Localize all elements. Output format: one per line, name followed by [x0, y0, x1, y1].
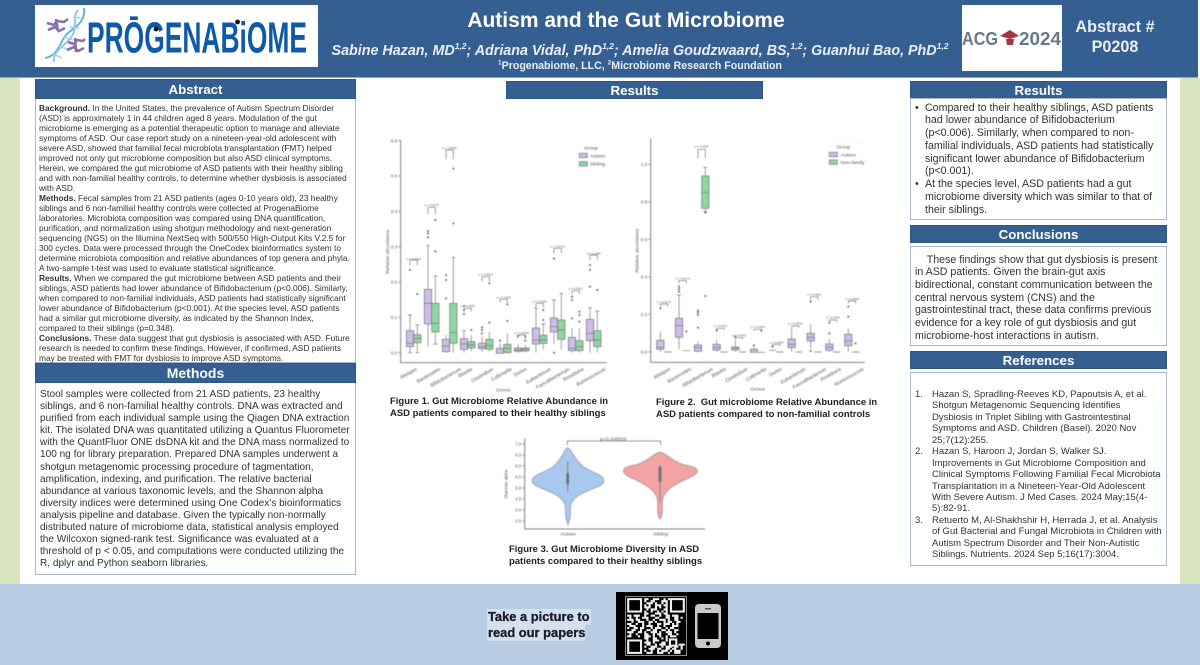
figure 1 legend: Sibling [590, 162, 605, 168]
methods text: distributed nature of microbiome data, statistical analysis employed [40, 522, 339, 533]
abstract text: determine microbiota composition and relative abundances of top genera and phyla. [39, 253, 350, 263]
logo: ACG 2024 [962, 5, 1062, 71]
methods text: siblings, and 6 non-familial healthy controls. DNA was extracted and [40, 401, 343, 412]
chart: figure 2 box plot: 0.2 [641, 312, 648, 317]
Dorea boxes [514, 331, 529, 353]
reference list: 5):82-91. [932, 503, 970, 514]
figure 2 legend: Autism [841, 152, 856, 158]
abstract text: Results. When we compared the gut microbiome between ASD patients and their [39, 273, 341, 283]
Faecalibacterium boxes [550, 244, 565, 353]
panel: conclusions [910, 246, 1167, 346]
results bullets: Compared to their healthy siblings, ASD patients [925, 102, 1153, 114]
logo: ACG 2024: ACG [962, 29, 998, 49]
chart: figure 1 box plot: 0.6 [391, 138, 398, 143]
bullet marks [915, 102, 919, 190]
Faecalibacterium boxes: p = 0.5741 [551, 244, 565, 248]
figure 1 legend: Autism [590, 153, 605, 159]
Collinsella boxes: p = 0.3146 [497, 295, 511, 299]
logo: ACG 2024: 2024 [1019, 29, 1061, 49]
abstract text: when compared to non-familial individuals, ASD patients had statistically significant [39, 293, 346, 303]
Ruminococcus boxes [586, 251, 601, 353]
Blautia boxes: p = 0.6284 [461, 304, 475, 308]
methods text: threshold of p < 0.05, and computations were conducted utilizing the [40, 546, 344, 557]
chart: figure 3 violin plot: 3.5 [515, 519, 522, 524]
chart: figure 2 box plot: Ruminococcus [834, 366, 865, 388]
chart: figure 2 box plot: Bacteroides [667, 366, 693, 385]
figure 1 legend: Group [584, 146, 598, 152]
abstract text: Conclusions. These data suggest that gut dysbiosis is associated with ASD. Future [39, 333, 350, 343]
Bacteroides boxes: p = 0.0275 [425, 203, 439, 207]
reference list: Clinical Symptoms Following Familial Fecal Microbiota [932, 469, 1161, 480]
methods text: kit. The isolated DNA was quantitated utilizing a Quantus Fluorometer [40, 425, 350, 436]
Bacteroides boxes [675, 277, 690, 351]
Roseburia boxes [826, 316, 840, 352]
methods text: Stool samples were collected from 21 ASD patients, 23 healthy [40, 389, 320, 400]
reference list: Dysbiosis in Triplet Sibling with Gastrointestinal [932, 412, 1131, 423]
Dorea boxes: p = 0.0005 [769, 340, 784, 344]
methods text: shotgun metagenomic processing procedure of tagmentation, [40, 462, 314, 473]
reference list: of Gut Bacterial and Fungal Microbiota in Children with [932, 526, 1162, 537]
chart: figure 3 violin plot: 5.5 [515, 475, 522, 480]
Eubacterium boxes [788, 322, 803, 352]
abstract text: (ASD) is approximately 1 in 44 children aged 8 years. Modulation of the gut [39, 113, 317, 123]
Alistipes boxes: p = 0.0028 [407, 257, 421, 261]
results bullets: (p<0.001). [925, 165, 974, 177]
chart: figure 2 box plot: Eubacterium [780, 367, 807, 386]
chart: figure 3 violin plot: 6.5 [515, 453, 522, 458]
caption: figure 1 [390, 396, 608, 419]
QR code and phone panel [616, 592, 728, 660]
chart: figure 1 box plot: Faecalibacterium [535, 367, 571, 391]
Roseburia boxes: p = 0.9421 [569, 287, 583, 291]
abstract text: had a similar gut microbiome diversity, as indicated by the Shannon Index, [39, 313, 313, 323]
Bifidobacterium boxes [694, 144, 709, 352]
chart: figure 1 box plot: 0.1 [391, 315, 398, 320]
chart: figure 3 violin plot: Sibling [653, 531, 668, 537]
chart: figure 3 violin plot: Shannon alpha [504, 469, 509, 499]
conclusions text: gastrointestinal tract, these data confirms previous [915, 304, 1151, 316]
chart: figure 3 violin plot: 4.0 [515, 508, 522, 513]
chart: figure 1 box plot: Clostridium [470, 367, 495, 384]
Ruminococcus boxes [845, 297, 859, 352]
chart: figure 1 box plot: Dorea [513, 366, 528, 379]
Eubacterium boxes [532, 300, 547, 353]
abstract text: Methods. Fecal samples from 21 ASD patients (ages 0-10 years old), 23 healthy [39, 193, 338, 203]
abstract text: severe ASD, showed that familial fecal microbiota transplantation (FMT) helped [39, 143, 332, 153]
abstract text: A two-sample t-test was used to evaluate statistical significance. [39, 263, 276, 273]
Eubacterium boxes: p = 0.0026 [788, 322, 803, 326]
chart: figure 1 box plot: 0.0 [391, 350, 398, 355]
abstract text: siblings and 6 non-familial healthy controls were collected at ProgenaBiome [39, 203, 319, 213]
Roseburia boxes: p = 0.0001 [826, 316, 840, 320]
chart: figure 1 box plot: Genus [496, 387, 511, 393]
chart: figure 1 box plot: Alistipes [399, 366, 419, 381]
conclusions text [915, 254, 1158, 342]
methods text: R, dplyr and Python seaborn libraries. [40, 558, 208, 569]
abstract text: may be treated with FMT for dysbiosis to improve ASD symptoms. [39, 353, 283, 363]
call to action text: read our papers [488, 625, 585, 640]
reference list: Transplantation in a Nineteen-Year-Old Adolescent [932, 480, 1145, 492]
Eubacterium boxes: p = 0.9326 [533, 300, 547, 304]
affiliations: 1Progenabiome, LLC, 2Microbiome Research Foundation [498, 59, 782, 72]
significance bracket [567, 436, 661, 445]
chart: figure 2 box plot: Clostridium [724, 367, 749, 384]
chart: figure 2 box plot: 0.8 [641, 200, 648, 205]
reference list: Retuerto M, Al-Shakhshir H, Herrada J, et al. Analysis [932, 515, 1157, 526]
Clostridium boxes [732, 333, 746, 352]
methods text: purified from each individual sample using the Qiagen DNA extraction [40, 413, 349, 424]
reference numbers: 1. [915, 389, 923, 400]
results bullets: (p<0.006). Similarly, when compared to non- [925, 127, 1134, 139]
chart: figure 3 violin plot: 7.0 [515, 442, 522, 447]
Alistipes boxes [406, 257, 421, 353]
Dorea boxes: p = 0.8394 [515, 331, 529, 335]
abstract text: with ASD. [39, 183, 75, 193]
call to action text: Take a picture to [488, 609, 589, 624]
abstract text: symptoms of ASD. Our case report study on a nineteen-year-old adolescent with [39, 133, 336, 143]
Bacteroides boxes: p = 0.0176 [676, 277, 690, 281]
reference list: Improvements in Gut Microbiome Composition and [932, 458, 1146, 469]
Blautia boxes: p = 0.0021 [713, 324, 728, 328]
conclusions text: evidence for a key role of gut dysbiosis and gut [915, 317, 1136, 329]
Blautia boxes [713, 324, 728, 352]
panel: right results [910, 98, 1167, 220]
chart: figure 1 box plot: Collinsella [490, 366, 513, 383]
chart: figure 1 box plot: 0.5 [391, 174, 398, 179]
reference numbers [915, 389, 923, 526]
panel: abstract [35, 79, 356, 363]
Alistipes boxes: p = 0.0276 [657, 300, 671, 304]
reference list [932, 389, 1162, 560]
bullet marks: • [915, 102, 919, 114]
figure 2 legend: Group [836, 144, 850, 150]
abstract text: sequencing (NGS) on the Illumina NextSeq with 500/550 High-Output Kits V.2.5 for [39, 233, 345, 243]
abstract text: and with non-familial healthy controls, to determine whether dysbiosis is associated [39, 173, 347, 183]
chart: figure 2 box plot: 0.0 [641, 350, 648, 355]
chart: figure 2 box plot: Roseburia [820, 366, 843, 383]
methods text: diversity indices were determined using One Codex's bioinformatics [40, 498, 341, 509]
Alistipes boxes [657, 300, 671, 352]
heading: conclusions: Conclusions [999, 227, 1078, 242]
Collinsella boxes [750, 325, 765, 352]
violin: sibling [623, 452, 697, 519]
heading: center results [506, 81, 763, 99]
chart: figure 2 box plot: Bifidobacterium [682, 367, 714, 389]
bullet marks: • [915, 178, 919, 190]
chart: figure 1 box plot: Ruminococcus [576, 366, 607, 388]
reference list: Shotgun Metagenomic Sequencing Identifies [932, 400, 1121, 411]
chart: figure 1 box plot: Roseburia [562, 366, 585, 383]
caption: figure 3: Figure 3. Gut Microbiome Diversity in ASD [509, 544, 699, 555]
conclusions text: central nervous system (CNS) and the [915, 292, 1095, 304]
Faecalibacterium boxes [807, 293, 822, 352]
authors: Sabine Hazan, MD1,2; Adriana Vidal, PhD1,2; Amelia Goudzwaard, BS,1,2; Guanhui Bao, PhD1,2 [332, 41, 948, 59]
chart: figure 3 violin plot: 6.0 [515, 463, 522, 468]
chart: figure 2 box plot: Collinsella [745, 366, 768, 383]
chart: figure 2 box plot: 0.4 [641, 275, 648, 280]
figure 2 legend [827, 142, 865, 167]
right green side strip [1180, 78, 1200, 584]
reference list: 25;7(12):255. [932, 435, 989, 446]
results bullets: At the species level, ASD patients had a gut [925, 178, 1131, 190]
chart: figure 1 box plot: Bacteroides [416, 366, 442, 385]
Collinsella boxes: p = 0.0834 [751, 325, 765, 329]
Roseburia boxes [568, 287, 583, 353]
caption: figure 3 [509, 544, 702, 567]
chart: figure 1 box plot: Relative abundance [385, 229, 391, 274]
chart: figure 3 violin plot: Autism [560, 531, 576, 537]
abstract text: improved not only gut microbiome composition but also ASD clinical symptoms. [39, 153, 332, 163]
abstract text: research is needed to confirm these findings. However, if confirmed, ASD patients [39, 343, 341, 353]
abstract text: laboratories. Microbiota composition was compared using DNA quantification, [39, 213, 325, 223]
conclusions text: These findings show that gut dysbiosis is present [927, 254, 1157, 266]
Blautia boxes [460, 304, 475, 353]
conclusions text: in ASD patients. Given the brain-gut axis [915, 266, 1105, 278]
Collinsella boxes [496, 295, 511, 353]
Clostridium boxes [478, 273, 493, 352]
significance bracket: p=0.346529 [600, 436, 627, 442]
methods text [40, 389, 350, 569]
chart: figure 2 box plot: Faecalibacterium [792, 367, 828, 391]
caption: figure 1: ASD patients compared to their healthy siblings [390, 408, 606, 419]
reference list: Hazan S, Haroon J, Jordan S, Walker SJ. [932, 446, 1106, 457]
reference list: With Severe Autism. J Med Cases. 2024 May;15(4- [932, 492, 1147, 503]
abstract text: Herein, we compared the gut microbiome of ASD patients with their healthy sibling [39, 163, 343, 173]
methods text: 100 ng for library preparation. Prepared DNA samples underwent a [40, 449, 338, 460]
chart: figure 1 box plot: Eubacterium [525, 367, 552, 386]
logo: Progenabiome [35, 5, 318, 67]
highlight line one [487, 609, 591, 625]
Bifidobacterium boxes: p = 0.0056 [443, 146, 457, 150]
figure 2 legend: Non-family [841, 160, 865, 166]
highlight line two [487, 625, 585, 641]
results bullets: microbiome diversity which was similar to that of [925, 191, 1152, 203]
chart: figure 3 violin plot: 4.5 [515, 496, 522, 501]
heading: center results: Results [610, 83, 659, 98]
chart: figure 2 box plot: Blautia [711, 366, 727, 379]
chart: figure 2 box plot: Relative abundance [634, 228, 640, 273]
abstract text: purification, and normalization using shotgun methodology and next-generation [39, 223, 331, 233]
Bifidobacterium boxes [442, 146, 457, 353]
results bullets: had lower abundance of Bifidobacterium [925, 114, 1115, 126]
chart: figure 1 box plot: Bifidobacterium [430, 367, 462, 389]
Faecalibacterium boxes: p = 0.0001 [807, 293, 822, 297]
violin: autism [532, 448, 604, 525]
heading: abstract [35, 79, 356, 99]
Clostridium boxes: p = 0.5620 [479, 273, 493, 277]
abstract text: lower abundance of Bifidobacterium (p<0.001). At the species level, ASD patients [39, 303, 339, 313]
caption: figure 3: patients compared to their healthy siblings [509, 556, 702, 567]
chart: figure 1 box plot: Blautia [457, 366, 474, 379]
chart: figure 2 box plot: Dorea [768, 366, 783, 379]
conclusions text: bidirectional, constant communication between the [915, 279, 1153, 291]
header banner [0, 0, 1198, 78]
Bifidobacterium boxes: p = 0.0004 [695, 144, 709, 148]
heading: methods: Methods [167, 365, 224, 381]
panel: references [910, 372, 1167, 566]
methods text: the Wilcoxon signed-rank test. Significance was evaluated at a [40, 534, 319, 545]
caption: figure 2 [656, 397, 877, 420]
chart: figure 3 violin plot: 5.0 [515, 486, 522, 491]
abstract text: Background. In the United States, the prevalence of Autism Spectrum Disorder [39, 103, 334, 113]
heading: abstract: Abstract [169, 82, 222, 97]
results bullets: familial individuals, ASD patients had statistically [925, 140, 1153, 152]
results bullets: their siblings. [925, 204, 987, 216]
abstract number: Abstract # [1075, 18, 1155, 36]
reference list: Symptoms and ASD. Children (Basel). 2020 Nov [932, 423, 1136, 434]
heading: methods [35, 363, 356, 383]
caption: figure 2: Figure 2. Gut microbiome Relative Abundance in [656, 397, 877, 408]
caption: figure 1: Figure 1. Gut Microbiome Relative Abundance in [390, 396, 608, 407]
chart: figure 2 box plot: 0.6 [641, 237, 648, 242]
call to action [487, 609, 591, 641]
abstract number: P0208 [1092, 38, 1138, 56]
methods text: abundance at various taxonomic levels, and the Shannon alpha [40, 486, 323, 497]
chart: figure 2 box plot: Genus [750, 387, 766, 393]
chart: figure 2 box plot: 1.0 [641, 162, 648, 167]
abstract text [39, 103, 350, 363]
Ruminococcus boxes: p = 0.0008 [845, 297, 859, 301]
QR code [625, 596, 687, 656]
reference numbers: 2. [915, 446, 923, 457]
Ruminococcus boxes: p = 0.1285 [587, 251, 601, 255]
caption: figure 2: ASD patients compared to non-familial controls [656, 409, 870, 420]
Clostridium boxes: p = 0.0002 [732, 333, 746, 337]
abstract text: compared to their siblings (p=0.348). [39, 323, 175, 333]
reference list: Siblings. Nutrients. 2024 Sep 5;16(17):3004. [932, 549, 1119, 560]
heading: right results [910, 81, 1167, 99]
panel: methods [35, 363, 356, 575]
icon: smartphone [695, 604, 721, 648]
reference list: Hazan S, Spradling-Reeves KD, Papoutsis A, et al. [932, 389, 1146, 400]
abstract number [1075, 18, 1155, 56]
methods text: with the QuantFluor ONE dsDNA kit and the DNA mass normalized to [40, 437, 349, 448]
conclusions text: microbiome-host interactions in autism. [915, 330, 1099, 342]
results bullets: significant lower abundance of Bifidobacterium [925, 152, 1144, 164]
chart: figure 1 box plot: 0.4 [391, 209, 398, 214]
figure 1 legend [577, 143, 605, 168]
title: Autism and the Gut Microbiome [467, 8, 785, 32]
reference list: Autism Spectrum Disorder and Their Non-Autistic [932, 538, 1139, 549]
reference numbers: 3. [915, 515, 923, 526]
heading: references [910, 351, 1167, 369]
methods text: analysis pipeline and database. Given the typically non-normally [40, 510, 326, 521]
heading: right results: Results [1014, 83, 1063, 98]
heading: references: References [1003, 353, 1074, 368]
chart: figure 1 box plot: 0.3 [391, 244, 398, 249]
heading: conclusions [910, 225, 1167, 243]
call to action text [488, 609, 590, 640]
methods text: amplification, indexing, and purification. The relative bacterial [40, 474, 312, 485]
abstract text: 300 cycles. Data were processed through the OneCodex bioinformatics system to [39, 243, 341, 253]
chart: figure 2 box plot: Alistipes [653, 366, 672, 381]
Bacteroides boxes [424, 203, 439, 347]
results bullets [925, 102, 1154, 216]
left green side strip [0, 78, 20, 584]
abstract text: microbiome is emerging as a potential therapeutic option to manage and alleviate [39, 123, 340, 133]
abstract text: siblings, ASD patients had lower abundance of Bifidobacterium (p<0.006). Similarly, [39, 283, 348, 293]
Dorea boxes [769, 340, 784, 352]
footer band [0, 584, 1200, 665]
chart: figure 1 box plot: 0.2 [391, 280, 398, 285]
